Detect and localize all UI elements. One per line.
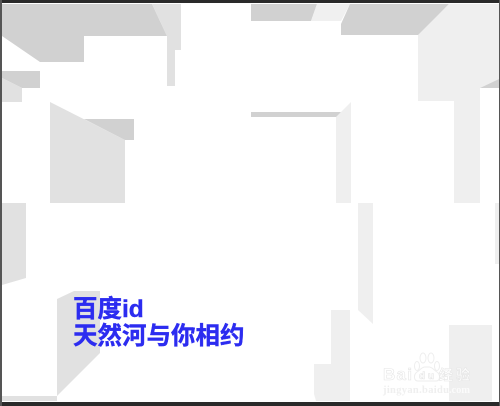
shapes: centre left block	[50, 102, 134, 203]
shapes: top centre block	[251, 4, 449, 35]
icon: watermark paw	[414, 353, 440, 381]
watermark text: Baidu 经验: 经验	[439, 367, 470, 383]
caption text	[73, 296, 244, 350]
watermark text: jingyan.baidu.com: jingyan.baidu	[382, 385, 449, 396]
shapes: top right block	[418, 4, 499, 203]
caption text: 天然河与你相约	[73, 323, 244, 350]
shapes: lower right blocks	[314, 203, 499, 401]
watermark text: jingyan.baidu.com: .com	[449, 385, 470, 396]
shapes: lower left blocks	[2, 203, 100, 401]
watermark text: Baidu 经验: Bai	[383, 365, 412, 384]
watermark text: Baidu 经验: du	[419, 371, 434, 382]
shapes: centre thin bar and column	[251, 102, 351, 203]
shapes: top left block	[2, 4, 181, 86]
watermark text: Baidu 经验	[383, 365, 470, 384]
caption text: 百度id	[73, 296, 144, 323]
shapes: left small block	[2, 71, 40, 102]
